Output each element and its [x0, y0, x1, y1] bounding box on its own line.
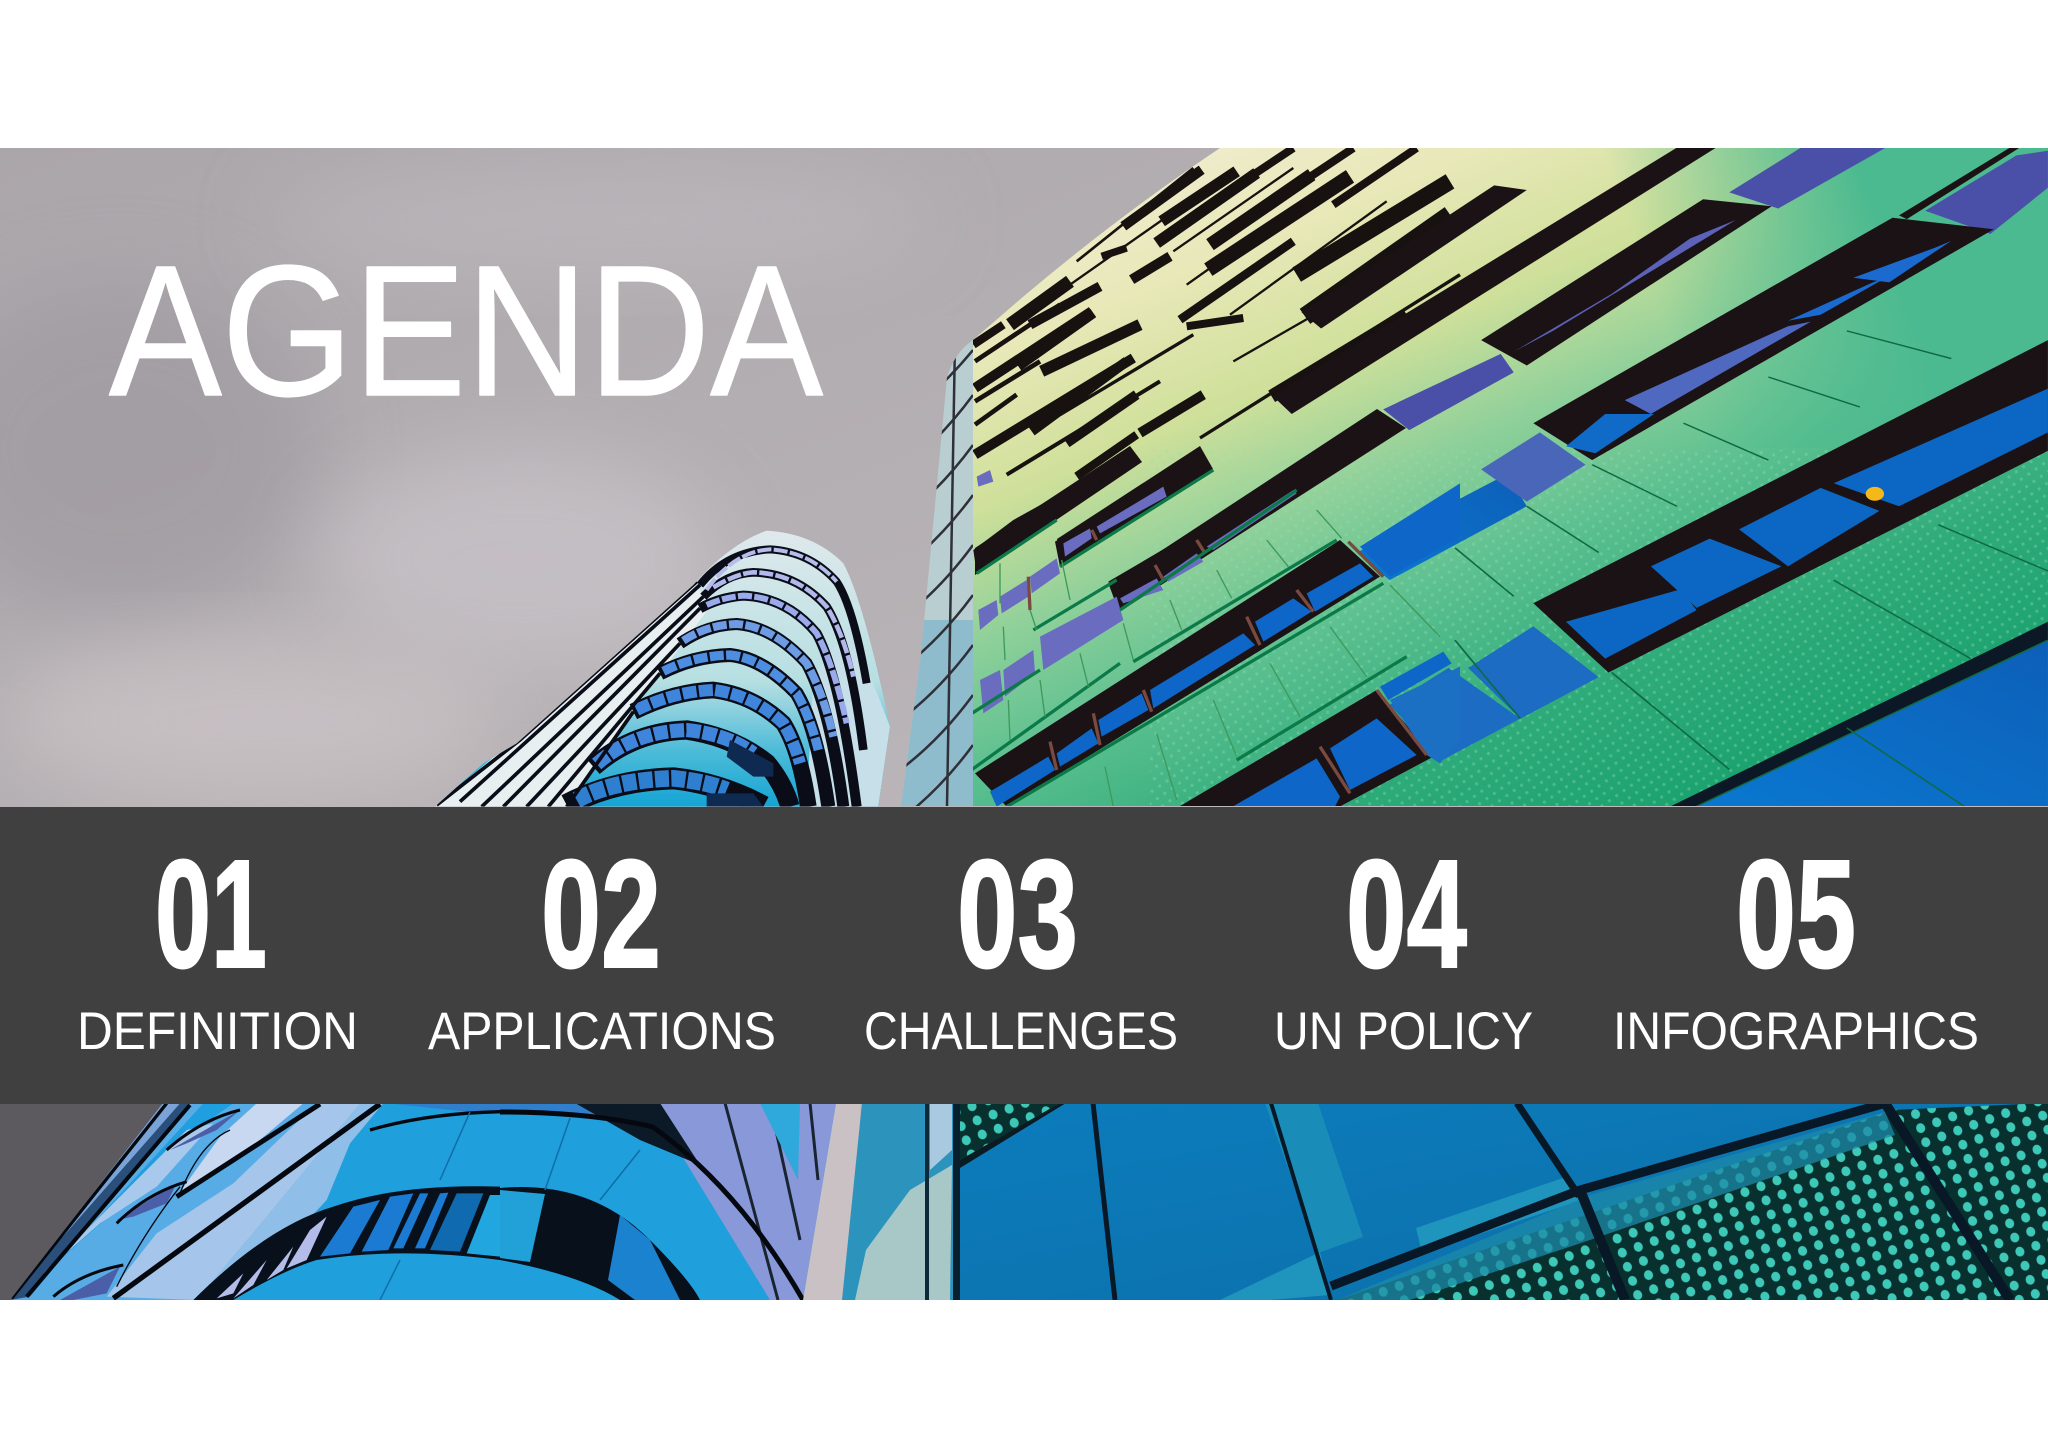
- upper-right windows: [1272, 148, 2048, 806]
- central tower, narrow curved edge: [901, 340, 973, 806]
- item 03 challenges: 03: [957, 828, 1078, 1000]
- central tower, lower part: [842, 1103, 960, 1300]
- curved window band: [193, 1186, 500, 1300]
- item 01 definition: [77, 828, 358, 1061]
- mid facade long window strips: [975, 409, 1406, 612]
- window bands: [567, 549, 867, 807]
- item 05 infographics: 05: [1736, 828, 1856, 1000]
- sky: [0, 148, 2048, 1300]
- item 02 applications: [428, 828, 776, 1061]
- left tower, upper part: [420, 527, 893, 810]
- item 04 un policy: 04: [1346, 828, 1467, 1000]
- right side of curved window band: [500, 1187, 700, 1300]
- main facade panels: [960, 148, 2048, 810]
- big blue glass: [1670, 622, 2048, 806]
- agenda band: [0, 807, 2048, 1104]
- item 01 definition: 01: [155, 828, 267, 1000]
- item 01 definition: DEFINITION: [77, 1002, 358, 1061]
- item 03 challenges: [864, 828, 1178, 1061]
- item 05 infographics: INFOGRAPHICS: [1613, 1002, 1979, 1061]
- item 05 infographics: [1613, 828, 1979, 1061]
- item 04 un policy: UN POLICY: [1274, 1002, 1533, 1061]
- slide: agenda: [0, 148, 2048, 1300]
- lower-left windows: [967, 470, 1460, 810]
- item 02 applications: 02: [541, 828, 661, 1000]
- upper facade strips: [973, 148, 1460, 476]
- photo: glass towers against a grey sky: [0, 148, 2048, 1303]
- perforated panels: [1337, 1103, 2048, 1300]
- item 04 un policy: [1274, 828, 1533, 1061]
- left tower, lower part: [0, 1103, 850, 1303]
- item 02 applications: APPLICATIONS: [428, 1002, 776, 1061]
- title: AGENDA: [109, 228, 823, 435]
- main window row: [1533, 340, 2048, 673]
- left side panels: [10, 1103, 500, 1300]
- main facade, blue glass and perforated panels: [960, 1103, 2048, 1300]
- diagonal stripes: [437, 582, 703, 807]
- mullions: [1093, 1103, 2010, 1300]
- item 03 challenges: CHALLENGES: [864, 1002, 1178, 1061]
